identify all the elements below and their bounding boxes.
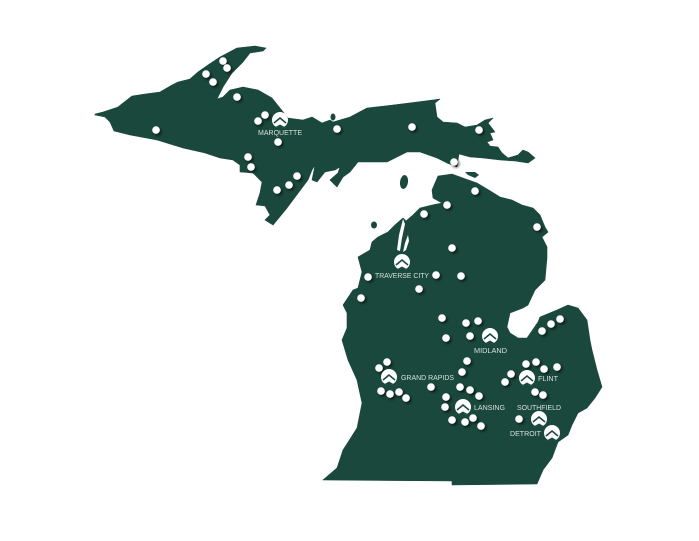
icon: Marquette hub xyxy=(272,112,288,128)
lower peninsula xyxy=(323,174,602,485)
label: Lansing: LANSING xyxy=(474,405,505,412)
label: Traverse City: TRAVERSE CITY xyxy=(375,273,429,280)
icon: Detroit hub xyxy=(544,425,560,442)
icon: Flint hub xyxy=(519,370,535,386)
label: Marquette: MARQUETTE xyxy=(258,130,302,137)
label: Flint: FLINT xyxy=(538,376,559,383)
label: Southfield: SOUTHFIELD xyxy=(517,405,561,412)
icon: Southfield hub xyxy=(531,411,547,428)
icon: Traverse City hub xyxy=(394,254,410,270)
islands xyxy=(330,114,479,228)
Grand Traverse Bay xyxy=(397,219,409,252)
location dots xyxy=(152,57,564,430)
label: Midland: MIDLAND xyxy=(474,348,507,355)
upper peninsula xyxy=(95,46,535,225)
label: Grand Rapids: GRAND RAPIDS xyxy=(401,375,454,382)
icon: Grand Rapids hub xyxy=(381,369,397,386)
icon: Midland hub xyxy=(482,328,498,344)
icon: Lansing hub xyxy=(455,399,471,416)
label: Detroit: DETROIT xyxy=(510,431,542,438)
